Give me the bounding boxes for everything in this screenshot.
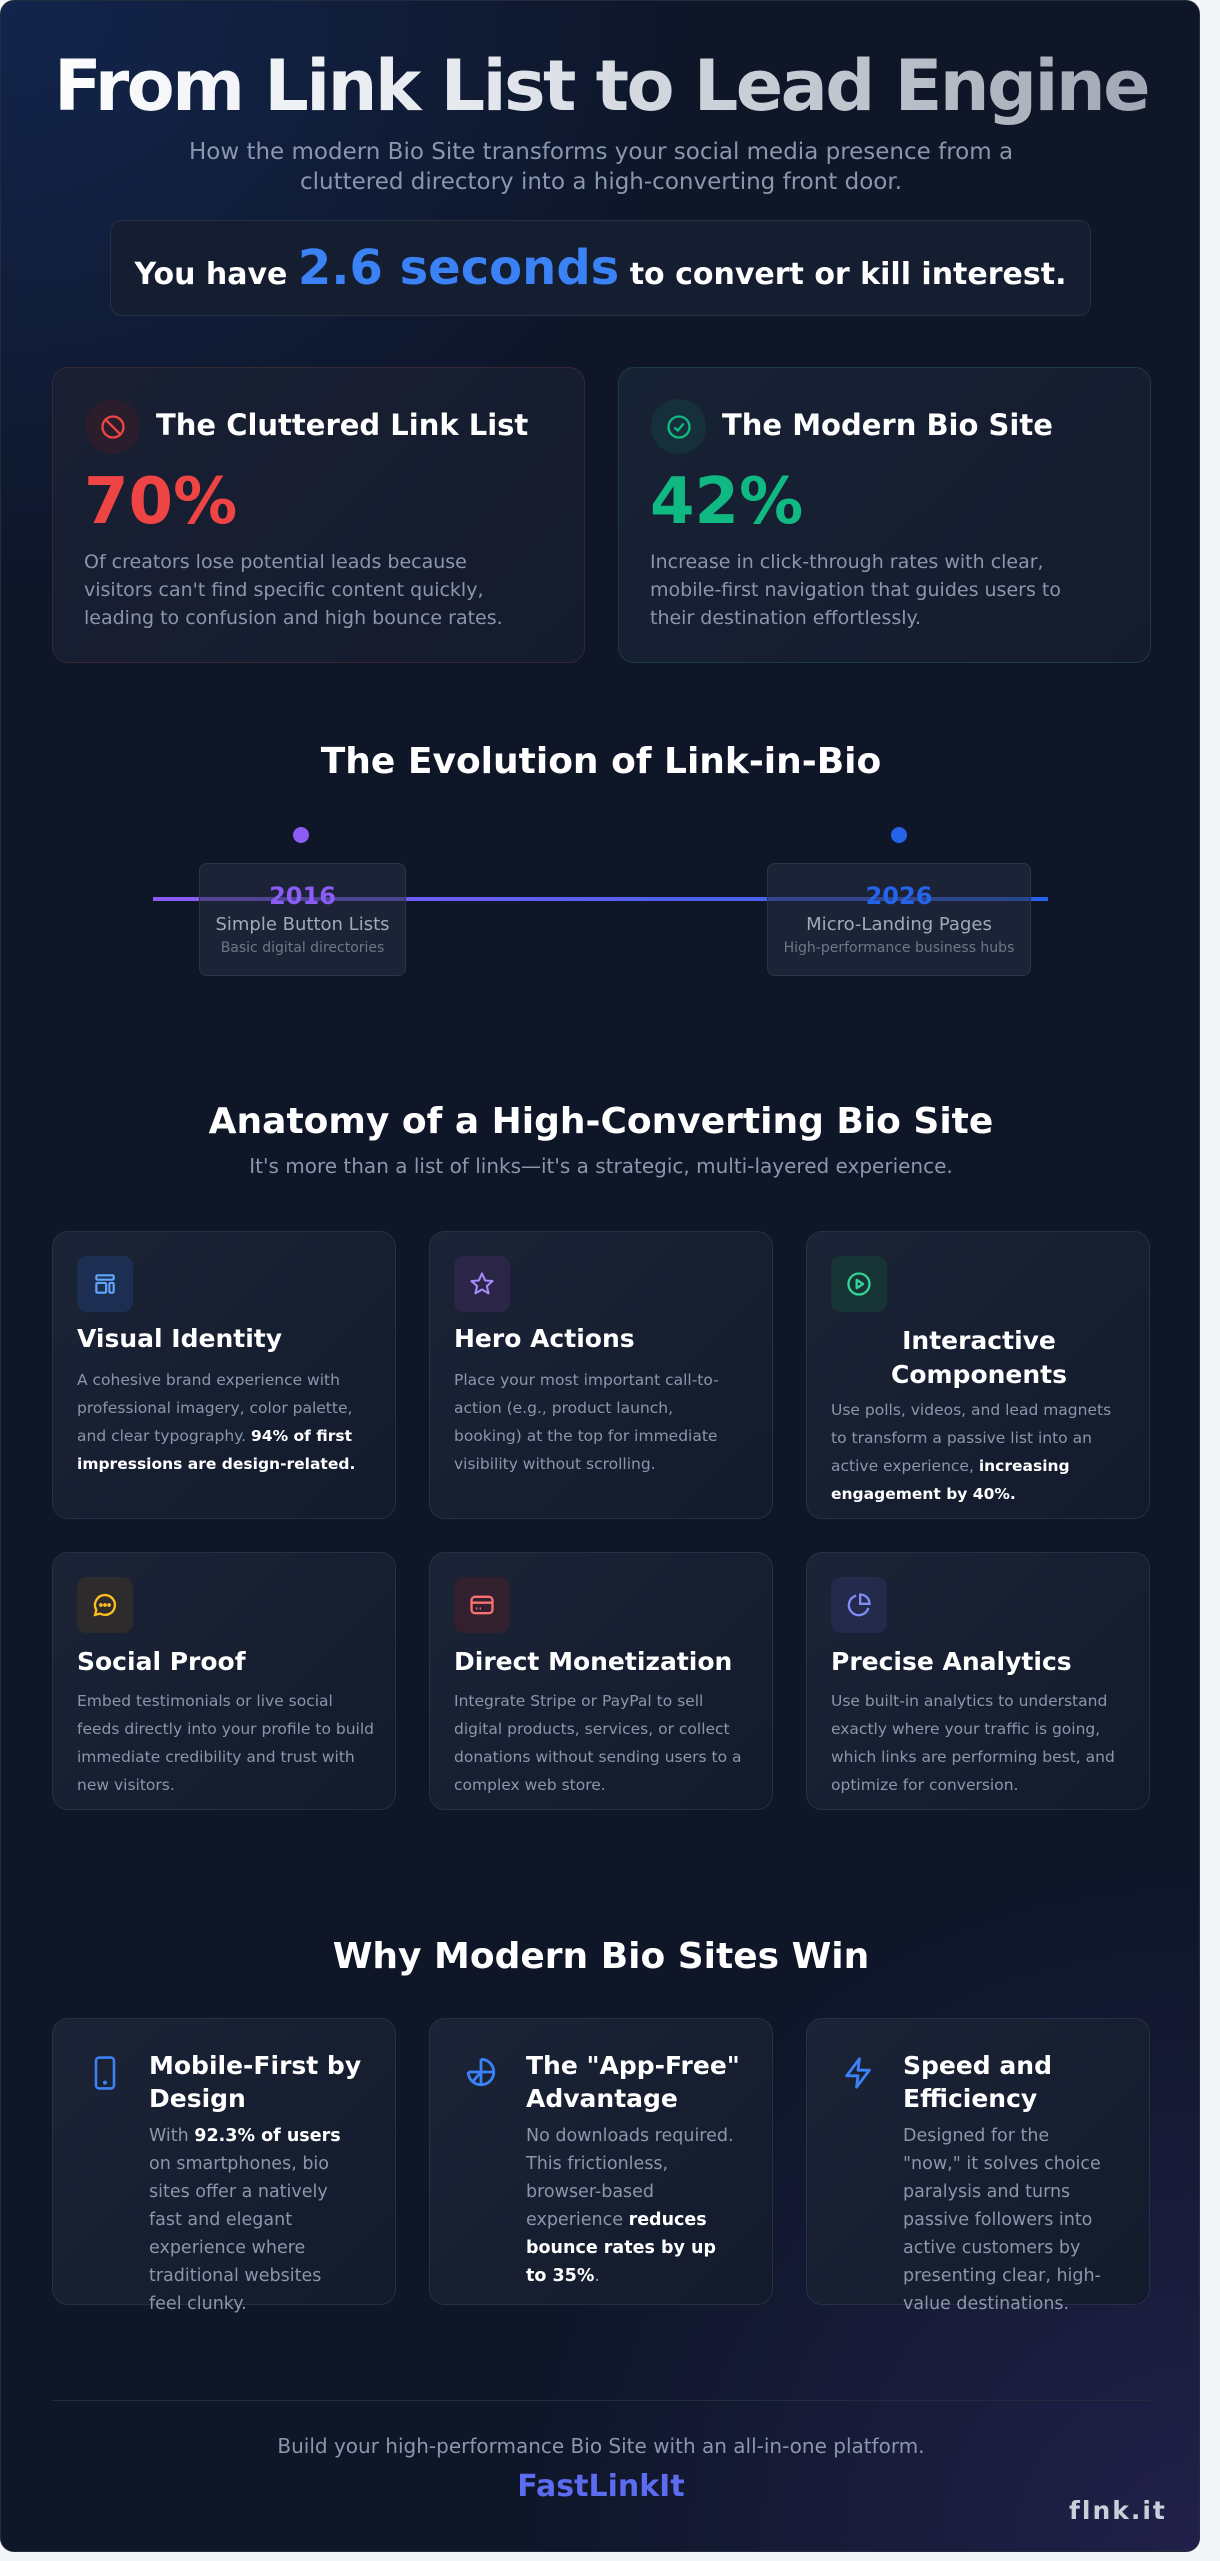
icon: layout [77, 1256, 133, 1312]
card: precise analytics: Precise Analytics [831, 1647, 1072, 1676]
watermark: flnk.it [1069, 2496, 1167, 2525]
panel: cluttered link list [52, 367, 585, 663]
card: interactive components [806, 1231, 1150, 1519]
heading: anatomy: Anatomy of a High-Converting Bio Site [209, 1101, 993, 1142]
anatomy subtitle: It's more than a list of links—it's a strategic, multi-layered experience. [249, 1154, 953, 1178]
icon: play [831, 1256, 887, 1312]
milestone 2016: Simple Button Lists [215, 914, 390, 935]
icon: ban [85, 399, 140, 454]
card: direct monetization: Integrate Stripe or PayPal to sell digital products, services, or collect donations without sending users to a complex web store. [454, 1692, 742, 1794]
subtitle: How the modern Bio Site transforms your social media presence from a cluttered directory into a high-converting front door. [189, 139, 1013, 195]
card: app-free: The "App-Free" Advantage [526, 2051, 740, 2113]
heading: why modern bio sites win: Why Modern Bio Sites Win [333, 1936, 869, 1977]
milestone 2016 [199, 863, 406, 976]
dot 2016 [293, 827, 309, 843]
milestone 2016: Basic digital directories [221, 940, 384, 956]
description: Increase in click-through rates with clear, mobile-first navigation that guides users to their destination effortlessly. [650, 551, 1061, 629]
icon: chat [77, 1577, 133, 1633]
card: direct monetization: Direct Monetization [454, 1647, 732, 1676]
card: interactive components: Use polls, videos, and lead magnets to transform a passive list into an active experience, increasing engagement by 40%. [831, 1401, 1111, 1503]
callout: 2.6 seconds [110, 220, 1091, 316]
card: mobile-first: Mobile-First by Design [149, 2051, 361, 2113]
card: speed: Designed for the "now," it solves choice paralysis and turns passive followers into active customers by presenting clear, high-value destinations. [903, 2126, 1101, 2314]
icon: star [454, 1256, 510, 1312]
icon: bolt [845, 2057, 871, 2089]
card: speed: Speed and Efficiency [903, 2051, 1052, 2113]
timeline [153, 827, 1048, 976]
icon: check [651, 399, 706, 454]
dot 2026 [891, 827, 907, 843]
timeline line [153, 897, 1048, 901]
icon: globe-ish [466, 2058, 496, 2086]
card: hero actions: Place your most important call-to-action (e.g., product launch, booking) at the top for immediate visibility without scrolling. [454, 1371, 719, 1473]
description: Of creators lose potential leads because visitors can't find specific content quickly, leading to confusion and high bounce rates. [84, 551, 503, 629]
card: mobile-first [52, 2018, 396, 2305]
card: app-free [429, 2018, 773, 2305]
heading: evolution: The Evolution of Link-in-Bio [321, 741, 881, 782]
card: speed [806, 2018, 1150, 2305]
title: From Link List to Lead Engine [54, 45, 1148, 127]
heading: The Cluttered Link List [156, 408, 528, 442]
milestone 2026 [767, 863, 1031, 976]
card: mobile-first: With 92.3% of users on smartphones, bio sites offer a natively fast and elegant experience where traditional websites feel clunky. [149, 2126, 341, 2314]
card: visual identity: Visual Identity [77, 1324, 282, 1353]
panel: modern bio site [618, 367, 1151, 663]
heading: The Modern Bio Site [722, 408, 1053, 442]
icon: phone [94, 2056, 116, 2090]
icon: pie [831, 1577, 887, 1633]
card: hero actions: Hero Actions [454, 1324, 635, 1353]
card: social proof: Embed testimonials or live social feeds directly into your profile to build immediate credibility and trust with new visitors. [77, 1692, 374, 1794]
footer brand: FastLinkIt [517, 2469, 685, 2504]
card: precise analytics [806, 1552, 1150, 1810]
callout: 2.6 seconds: You have 2.6 seconds to convert or kill interest. [134, 240, 1066, 296]
card: precise analytics: Use built-in analytics to understand exactly where your traffic is going, which links are performing best, and optimize for conversion. [831, 1692, 1115, 1794]
card: interactive components: Interactive Components [891, 1326, 1067, 1389]
milestone 2026: 2026 [866, 882, 932, 910]
card: social proof [52, 1552, 396, 1810]
milestone 2016: 2016 [269, 882, 336, 910]
stat 42%: 42% [650, 465, 803, 539]
icon: card [454, 1577, 510, 1633]
card: hero actions [429, 1231, 773, 1519]
stat 70%: 70% [84, 465, 237, 539]
card: visual identity: A cohesive brand experience with professional imagery, color palette, and clear typography. 94% of first impressions are design-related. [77, 1371, 355, 1473]
footer text: Build your high-performance Bio Site with an all-in-one platform. [277, 2434, 925, 2458]
milestone 2026: High-performance business hubs [784, 940, 1014, 956]
card: social proof: Social Proof [77, 1647, 246, 1676]
card: visual identity [52, 1231, 396, 1519]
milestone 2026: Micro-Landing Pages [806, 914, 992, 935]
card: app-free: No downloads required. This frictionless, browser-based experience reduces bounce rates by up to 35%. [526, 2126, 734, 2286]
card: direct monetization [429, 1552, 773, 1810]
